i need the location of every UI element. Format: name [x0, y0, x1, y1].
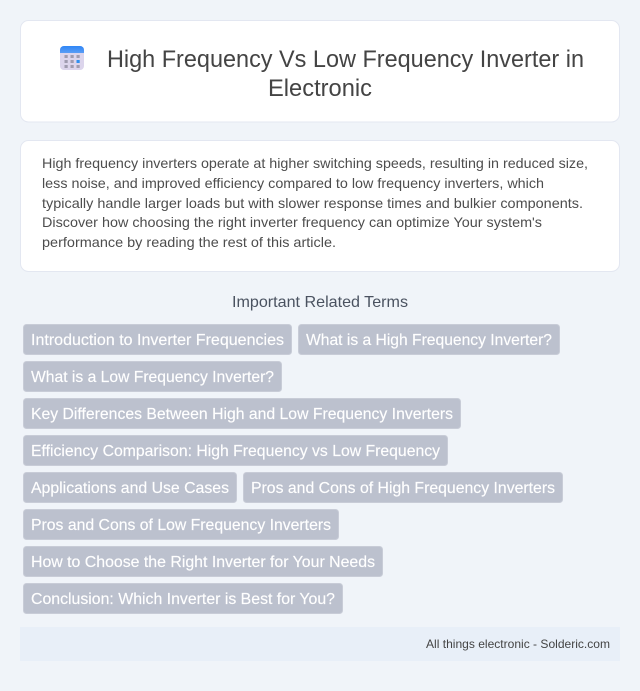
intro paragraph: performance by reading the rest of this article.: [42, 234, 336, 250]
tag: [298, 324, 560, 354]
tag: [24, 546, 382, 576]
tag: What is a Low Frequency Inverter?: [31, 369, 274, 386]
tag: [24, 510, 338, 540]
intro paragraph: less noise, and improved efficiency compared to low frequency inverters, which: [42, 175, 544, 191]
intro paragraph: Discover how choosing the right inverter frequency can optimize Your system's: [42, 214, 542, 230]
intro paragraph: High frequency inverters operate at higher switching speeds, resulting in reduced size,: [42, 155, 588, 171]
heading: important related terms: Important Related Terms: [232, 294, 408, 311]
intro paragraph: typically handle larger loads but with slower response times and bulkier components.: [42, 195, 583, 211]
panel: introduction text: [20, 140, 620, 272]
tag: [24, 436, 448, 466]
title: Electronic: [268, 75, 372, 102]
footer: [20, 627, 620, 661]
tag: [24, 472, 236, 502]
tag: How to Choose the Right Inverter for Your Needs: [31, 554, 375, 571]
tag: Efficiency Comparison: High Frequency vs Low Frequency: [31, 443, 440, 460]
tag: [24, 584, 342, 614]
title: [107, 46, 584, 102]
intro paragraph: [42, 155, 588, 250]
icon: calendar: [60, 46, 84, 70]
tag: [24, 324, 292, 354]
tag: Key Differences Between High and Low Frequency Inverters: [31, 406, 453, 423]
panel: related terms tags: [24, 324, 562, 614]
footer: All things electronic - Solderic.com: [426, 637, 610, 651]
tag: Introduction to Inverter Frequencies: [31, 332, 284, 349]
tag: [244, 472, 562, 502]
tag: [24, 362, 282, 392]
title: High Frequency Vs Low Frequency Inverter in: [107, 46, 584, 73]
tag: Conclusion: Which Inverter is Best for You?: [31, 591, 335, 608]
tag: Applications and Use Cases: [31, 480, 229, 497]
header panel: [20, 20, 620, 122]
tag: Pros and Cons of Low Frequency Inverters: [31, 517, 331, 534]
tag: Pros and Cons of High Frequency Inverters: [251, 480, 555, 497]
tag: [24, 398, 460, 428]
tag: What is a High Frequency Inverter?: [306, 332, 552, 349]
